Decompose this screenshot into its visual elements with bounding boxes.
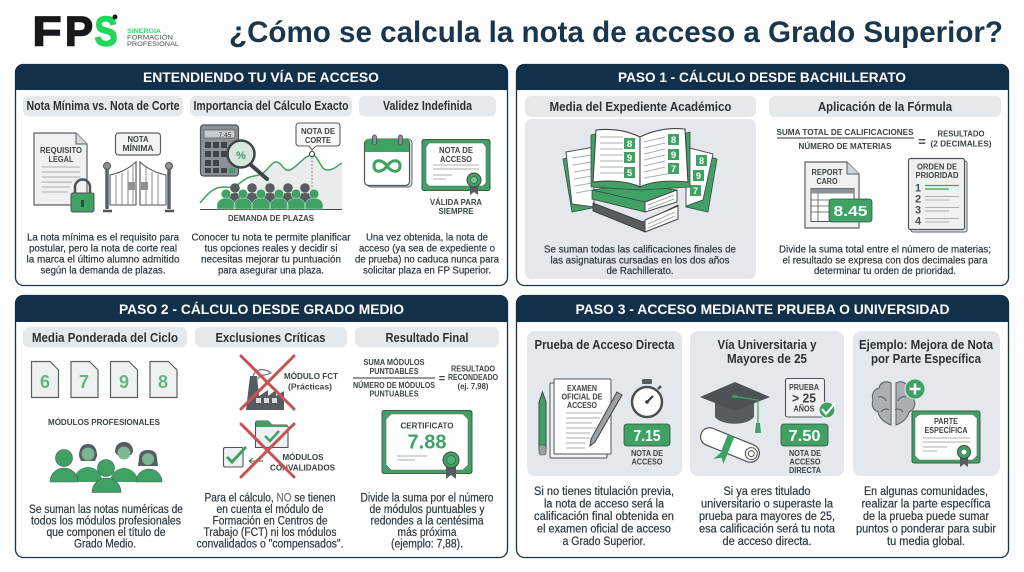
icon: stopwatch (632, 379, 662, 417)
formula: suma módulos: NÚMERO DE MÓDULOS (353, 381, 436, 390)
icon: nota mínima gate: MÍNIMA (122, 144, 154, 153)
subheading: validez (359, 96, 496, 116)
text: suman notas: que componen el título de (46, 527, 166, 539)
icon: convalidated excluded (224, 421, 336, 477)
icon: books (563, 129, 717, 232)
label: nota de acceso directa: NOTA DE (789, 449, 822, 458)
logo: FPS Sinergia: PROFESIONAL (127, 42, 180, 48)
card: prueba directa (527, 331, 682, 476)
heading: entendiendo: ENTENDIENDO TU VÍA DE ACCESO (143, 69, 379, 85)
icon: prueba mayores de 25: AÑOS (794, 404, 815, 414)
icon: exam sheet and pencils: ACCESO (567, 401, 597, 410)
icon: books: 9 (671, 150, 676, 161)
text: divide la suma: de módulos puntuables y (370, 504, 485, 516)
icon: orden de prioridad: PRIORIDAD (916, 171, 959, 180)
icon: certificate parte específica: PARTE (934, 417, 959, 426)
heading: ejemplo (859, 338, 994, 366)
subheading: exclusiones (195, 327, 347, 348)
icon: certificado 7.88: 7.88 (408, 432, 446, 454)
heading: paso 3: PASO 3 - ACCESO MEDIANTE PRUEBA O UNIVERSIDAD (576, 301, 950, 317)
card: media expediente (525, 119, 756, 279)
label: demanda de plazas: DEMANDA DE PLAZAS (228, 214, 315, 223)
icon: certificate parte específica: ESPECÍFICA (924, 426, 968, 435)
label: nota de acceso directa: DIRECTA (789, 466, 821, 475)
text: sin titulación (534, 486, 674, 548)
formula: suma módulos: SUMA MÓDULOS (364, 358, 425, 367)
text: nota mínima (26, 232, 180, 276)
icon: diploma scroll (694, 425, 762, 475)
subheading: aplicación: Aplicación de la Fórmula (818, 100, 953, 114)
label: módulos convalidados: MÓDULOS (282, 453, 324, 462)
heading: ejemplo: por Parte Específica (871, 352, 982, 366)
text: nota mínima: la marca el último alumno admitido (26, 254, 180, 266)
text: comunidades: puntos o ponderar para subir (856, 524, 996, 536)
subheading: resultado final: Resultado Final (386, 331, 468, 345)
heading: vía universitaria (718, 338, 817, 366)
heading: ejemplo: Ejemplo: Mejora de Nota (859, 338, 994, 352)
icon: prueba mayores de 25: PRUEBA (789, 383, 819, 392)
formula: suma módulos: RESULTADO (451, 364, 495, 374)
icon: books: 8 (699, 156, 704, 166)
text: comunidades: En algunas comunidades, (864, 486, 988, 498)
logo: FPS Sinergia (32, 8, 180, 54)
icon: orden de prioridad: 2 (915, 194, 921, 206)
formula: suma total: NÚMERO DE MATERIAS (798, 142, 892, 151)
formula: suma módulos: PUNTDABLES (370, 367, 419, 376)
callout: nota de corte: CORTE (305, 136, 332, 145)
text: universitario: Si ya eres titulado (724, 486, 810, 498)
text: comunidades: realizar la parte específica (862, 498, 991, 510)
panel: paso 1 bachillerato (516, 64, 1009, 286)
panel: paso 3 prueba o universidad (516, 295, 1009, 558)
text: sin titulación: calificación final obtenida en (534, 511, 674, 523)
text: sin titulación: Si no tienes titulación previa, (534, 486, 674, 498)
text: universitario: esa calificación será tu nota (699, 524, 836, 536)
text: universitario: universitario o superaste la (701, 498, 834, 510)
heading: vía universitaria: Vía Universitaria y (718, 338, 817, 352)
logo: FPS Sinergia: P (65, 8, 93, 54)
label: módulo fct (284, 372, 338, 392)
icon: orden de prioridad: 3 (915, 204, 921, 216)
formula: suma total (776, 128, 992, 151)
text: exclusiones: convalidados o "compensados". (196, 538, 344, 550)
subheading: media del expediente: Media del Expediente Académico (550, 100, 732, 114)
subheading: resultado final (355, 327, 499, 348)
icon: factory excluded (241, 356, 338, 410)
logo: FPS Sinergia: S (94, 8, 118, 54)
icons: module documents: 8 (158, 372, 168, 392)
chart: demanda de plazas (200, 123, 342, 210)
icon: books: 7 (693, 186, 698, 196)
text: suma calificaciones: las asignaturas cursadas en los dos años (550, 254, 730, 266)
label: nota de acceso directa (789, 449, 822, 475)
text: suman notas (29, 504, 183, 550)
icon: requisito legal document with lock (34, 133, 94, 212)
text: divide la suma: (ejemplo: 7,88). (391, 538, 463, 550)
text: importancia (192, 232, 351, 276)
card: vía universitaria (690, 331, 844, 476)
people crowd (217, 183, 323, 209)
text: divide la suma: Divide la suma por el número (360, 492, 494, 504)
subheading: exclusiones: Exclusiones Críticas (216, 331, 326, 345)
icon: report card 8.45: REPORT (812, 168, 843, 177)
badge: 7.15 (624, 424, 670, 446)
label: módulo fct: MÓDULO FCT (284, 372, 338, 381)
text: validez: acceso (ya sea de expediente o (359, 242, 495, 254)
text: divide la suma (779, 244, 991, 277)
icon: report card 8.45: CARO (816, 177, 838, 186)
text: nota mínima: La nota mínima es el requisito para (27, 232, 179, 244)
text: importancia: necesitas mejorar tu puntuación (201, 254, 341, 266)
magnifier: % (236, 150, 246, 162)
text: validez (355, 232, 499, 276)
icon: certificate nota de acceso: NOTA DE (439, 146, 474, 155)
text: exclusiones: Formación en Centros de (212, 516, 328, 528)
text: nota mínima: postular, pero la nota de corte real (29, 242, 177, 254)
heading: vía universitaria: Mayores de 25 (727, 352, 807, 366)
subheading: importancia (190, 96, 352, 116)
text: divide la suma (360, 492, 494, 550)
icon: exam sheet and pencils: OFICIAL DE (562, 392, 603, 402)
text: suman notas: todos los módulos profesionales (31, 516, 181, 528)
text: comunidades: tu media global. (887, 536, 965, 548)
subheading: media ponderada (23, 327, 187, 348)
label: nota de acceso: ACCESO (632, 458, 662, 466)
icon: prueba mayores de 25: > 25 (792, 390, 816, 406)
subheading: nota mínima vs corte: Nota Mínima vs. Nota de Corte (26, 99, 180, 113)
icon: orden de prioridad (908, 158, 967, 232)
formula: suma módulos (353, 358, 498, 398)
text: universitario (699, 486, 836, 548)
text: divide la suma: determinar tu orden de prioridad. (814, 265, 956, 277)
text: comunidades: de la prueba puede sumar (863, 511, 989, 523)
icon: books: 5 (627, 168, 633, 179)
text: suma calificaciones: Se suman todas las calificaciones finales de (544, 244, 736, 256)
icon: exam sheet and pencils: EXAMEN (567, 384, 597, 393)
text: sin titulación: el examen oficial de acceso (537, 524, 671, 536)
panel: entendiendo tu vía de acceso (15, 64, 508, 286)
icon: certificate nota de acceso: ACCESO (440, 155, 472, 164)
icon: prueba mayores de 25 (786, 378, 836, 418)
icons: module documents: 6 (40, 372, 50, 392)
label: módulos profesionales: MÓDULOS PROFESIONALES (48, 418, 161, 427)
text: comunidades (856, 486, 996, 548)
text: divide la suma: Divide la suma total entre el número de materias; (779, 244, 991, 256)
formula: suma total: = (918, 134, 926, 149)
icon: exam sheet and pencils (539, 379, 622, 458)
text: validez: Una vez obtenida, la nota de (366, 232, 488, 244)
text: validez: solicitar plaza en FP Superior. (363, 264, 491, 276)
icon: orden de prioridad: 1 (915, 182, 921, 194)
text: exclusiones: Para el cálculo, NO se tienen (204, 492, 336, 504)
subheading: importancia: Importancia del Cálculo Exacto (194, 99, 349, 113)
subheading: media ponderada: Media Ponderada del Ciclo (32, 331, 178, 345)
badge: 7.15: 7.15 (634, 428, 661, 445)
icon: calculator: 7.45 (219, 132, 232, 139)
title: ¿Cómo se calcula la nota de acceso a Grado Superior? (229, 16, 1003, 49)
icons: module documents (32, 362, 177, 398)
logo: FPS Sinergia: SINERGIA (127, 29, 162, 35)
icon: plus circle (905, 379, 925, 399)
text: sin titulación: la nota de acceso será la (544, 498, 665, 510)
label: nota de acceso: NOTA DE (631, 449, 664, 458)
label: módulo fct: (Prácticas) (288, 382, 332, 392)
formula: suma módulos: RECONDEADO (448, 373, 498, 382)
text: importancia: para asegurar una plaza. (218, 264, 324, 276)
text: universitario: de acceso directa. (722, 536, 812, 548)
card: ejemplo mejora (853, 331, 1000, 476)
formula: suma módulos: = (439, 373, 445, 385)
heading: paso 2: PASO 2 - CÁLCULO DESDE GRADO MEDIO (119, 301, 404, 317)
label: nota de acceso (631, 449, 664, 466)
text: universitario: prueba para mayores de 25, (699, 511, 835, 523)
panel: paso 2 grado medio (15, 295, 508, 558)
text: exclusiones: en cuenta el módulo de (216, 504, 324, 516)
icon: orden de prioridad: 4 (915, 216, 922, 228)
icon: books: 9 (627, 153, 632, 164)
text: suma calificaciones: de Rachillerato. (606, 265, 674, 277)
icon: students (50, 442, 162, 492)
icon: brain (872, 382, 915, 425)
formula: suma total: (2 DECIMALES) (930, 140, 992, 148)
icon: nota mínima gate (103, 133, 174, 211)
icon: certificado 7.88 (382, 410, 472, 479)
icon: certificate nota de acceso (422, 140, 490, 195)
badge: 7.50: 7.50 (788, 428, 821, 445)
logo: FPS Sinergia: F (32, 8, 62, 54)
icon: requisito legal document with lock: REQUISITO (40, 146, 82, 155)
heading: prueba directa: Prueba de Acceso Directa (534, 338, 675, 352)
formula: suma módulos: PUNTUABLES (370, 390, 419, 398)
text: importancia: tus opciones reales y decidir si (204, 242, 338, 254)
label: válida para siempre: VÁLIDA PARA (430, 198, 482, 207)
badge: 7.50 (781, 424, 828, 446)
icon: books: 7 (671, 164, 676, 175)
label: nota de acceso directa: ACCESO (790, 458, 820, 466)
icon: books: 9 (696, 171, 701, 181)
icon: books: 8 (671, 135, 676, 146)
magnifier (228, 140, 267, 179)
text: exclusiones: Trabajo (FCT) ni los módulos (204, 527, 337, 539)
icon: calculator (200, 125, 238, 176)
subheading: aplicación (769, 96, 1001, 117)
callout: nota de corte: NOTA DE (301, 127, 336, 136)
subheading: media del expediente (525, 96, 756, 117)
icon: calendar infinity (364, 135, 412, 187)
heading: paso 1: PASO 1 - CÁLCULO DESDE BACHILLERATO (618, 69, 906, 85)
subheading: nota mínima vs corte (23, 96, 183, 116)
formula: suma total: RESULTADO (938, 130, 984, 138)
text: suman notas: Grado Medio. (74, 538, 136, 550)
formula: suma módulos: (ej. 7,98) (458, 382, 489, 391)
text: sin titulación: a Grado Superior. (562, 536, 646, 548)
callout: nota de corte (296, 123, 340, 150)
icon: certificate parte específica (912, 411, 980, 467)
icon: graduation cap (700, 382, 770, 433)
icon: report card 8.45: 8.45 (834, 203, 868, 220)
text: importancia: Conocer tu nota te permite planificar (192, 232, 351, 244)
text: divide la suma: más próxima (398, 527, 457, 539)
icon: requisito legal document with lock: LEGAL (48, 155, 74, 164)
icons: module documents: 9 (119, 372, 129, 392)
text: divide la suma: redondes a la centésima (370, 516, 484, 528)
text: suma calificaciones (544, 244, 736, 277)
label: válida para siempre: SIEMPRE (438, 207, 474, 216)
label: módulos convalidados (270, 453, 336, 472)
text: divide la suma: el resultado se expresa con dos decimales para (782, 254, 988, 266)
icon: nota mínima gate: NOTA (128, 135, 149, 144)
icon: certificado 7.88: CERTIFICATO (400, 422, 454, 430)
label: módulos convalidados: CONVALIDADOS (270, 464, 336, 472)
icon: report card 8.45 (805, 162, 872, 228)
text: suman notas: Se suman las notas numéricas de (29, 504, 183, 516)
text: exclusiones (196, 492, 344, 550)
icon: books: 8 (627, 139, 632, 150)
label: válida para siempre (430, 198, 482, 216)
subheading: validez: Validez Indefinida (383, 99, 473, 113)
icon: orden de prioridad: ORDEN DE (917, 162, 958, 172)
text: validez: de prueba) no caduca nunca para (355, 254, 499, 266)
icons: module documents: 7 (79, 372, 89, 392)
text: nota mínima: según la demanda de plazas. (40, 264, 166, 276)
formula: suma total: SUMA TOTAL DE CALIFICACIONES (776, 128, 914, 137)
logo: FPS Sinergia: FORMACIÓN (127, 34, 173, 42)
